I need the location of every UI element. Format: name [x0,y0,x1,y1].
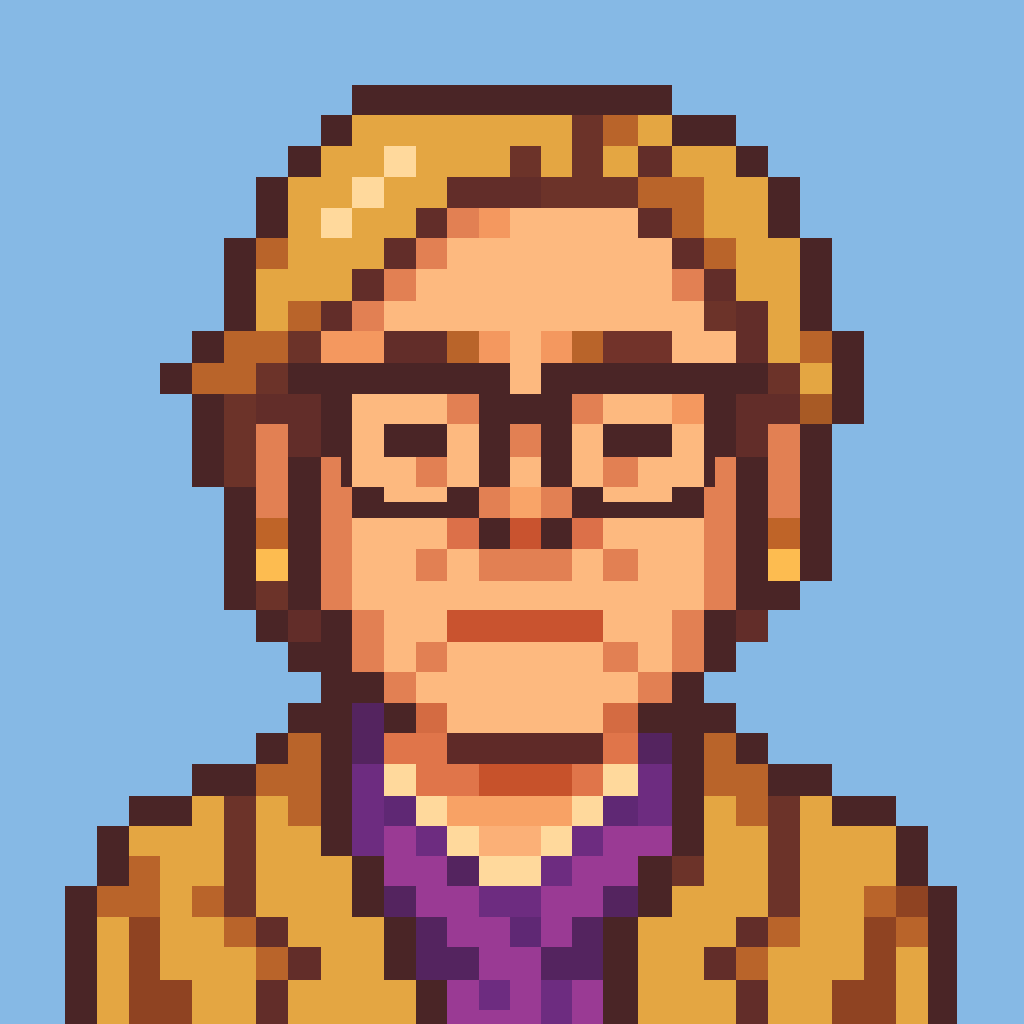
eyes [384,424,672,457]
glasses [288,363,768,518]
ears and earrings [256,424,800,581]
chin line and neck [384,703,638,856]
jacket: left side [65,733,416,1024]
earrings [256,549,800,581]
earring clasps [256,518,800,549]
face skin [321,208,736,733]
purple shirt [288,703,736,1024]
hair and head outline [160,85,864,703]
mouth [447,610,603,642]
shirt collar [384,764,638,886]
nose [479,487,572,549]
ears [256,424,800,518]
jacket: right side [638,733,957,1024]
eyebrows [384,331,672,363]
